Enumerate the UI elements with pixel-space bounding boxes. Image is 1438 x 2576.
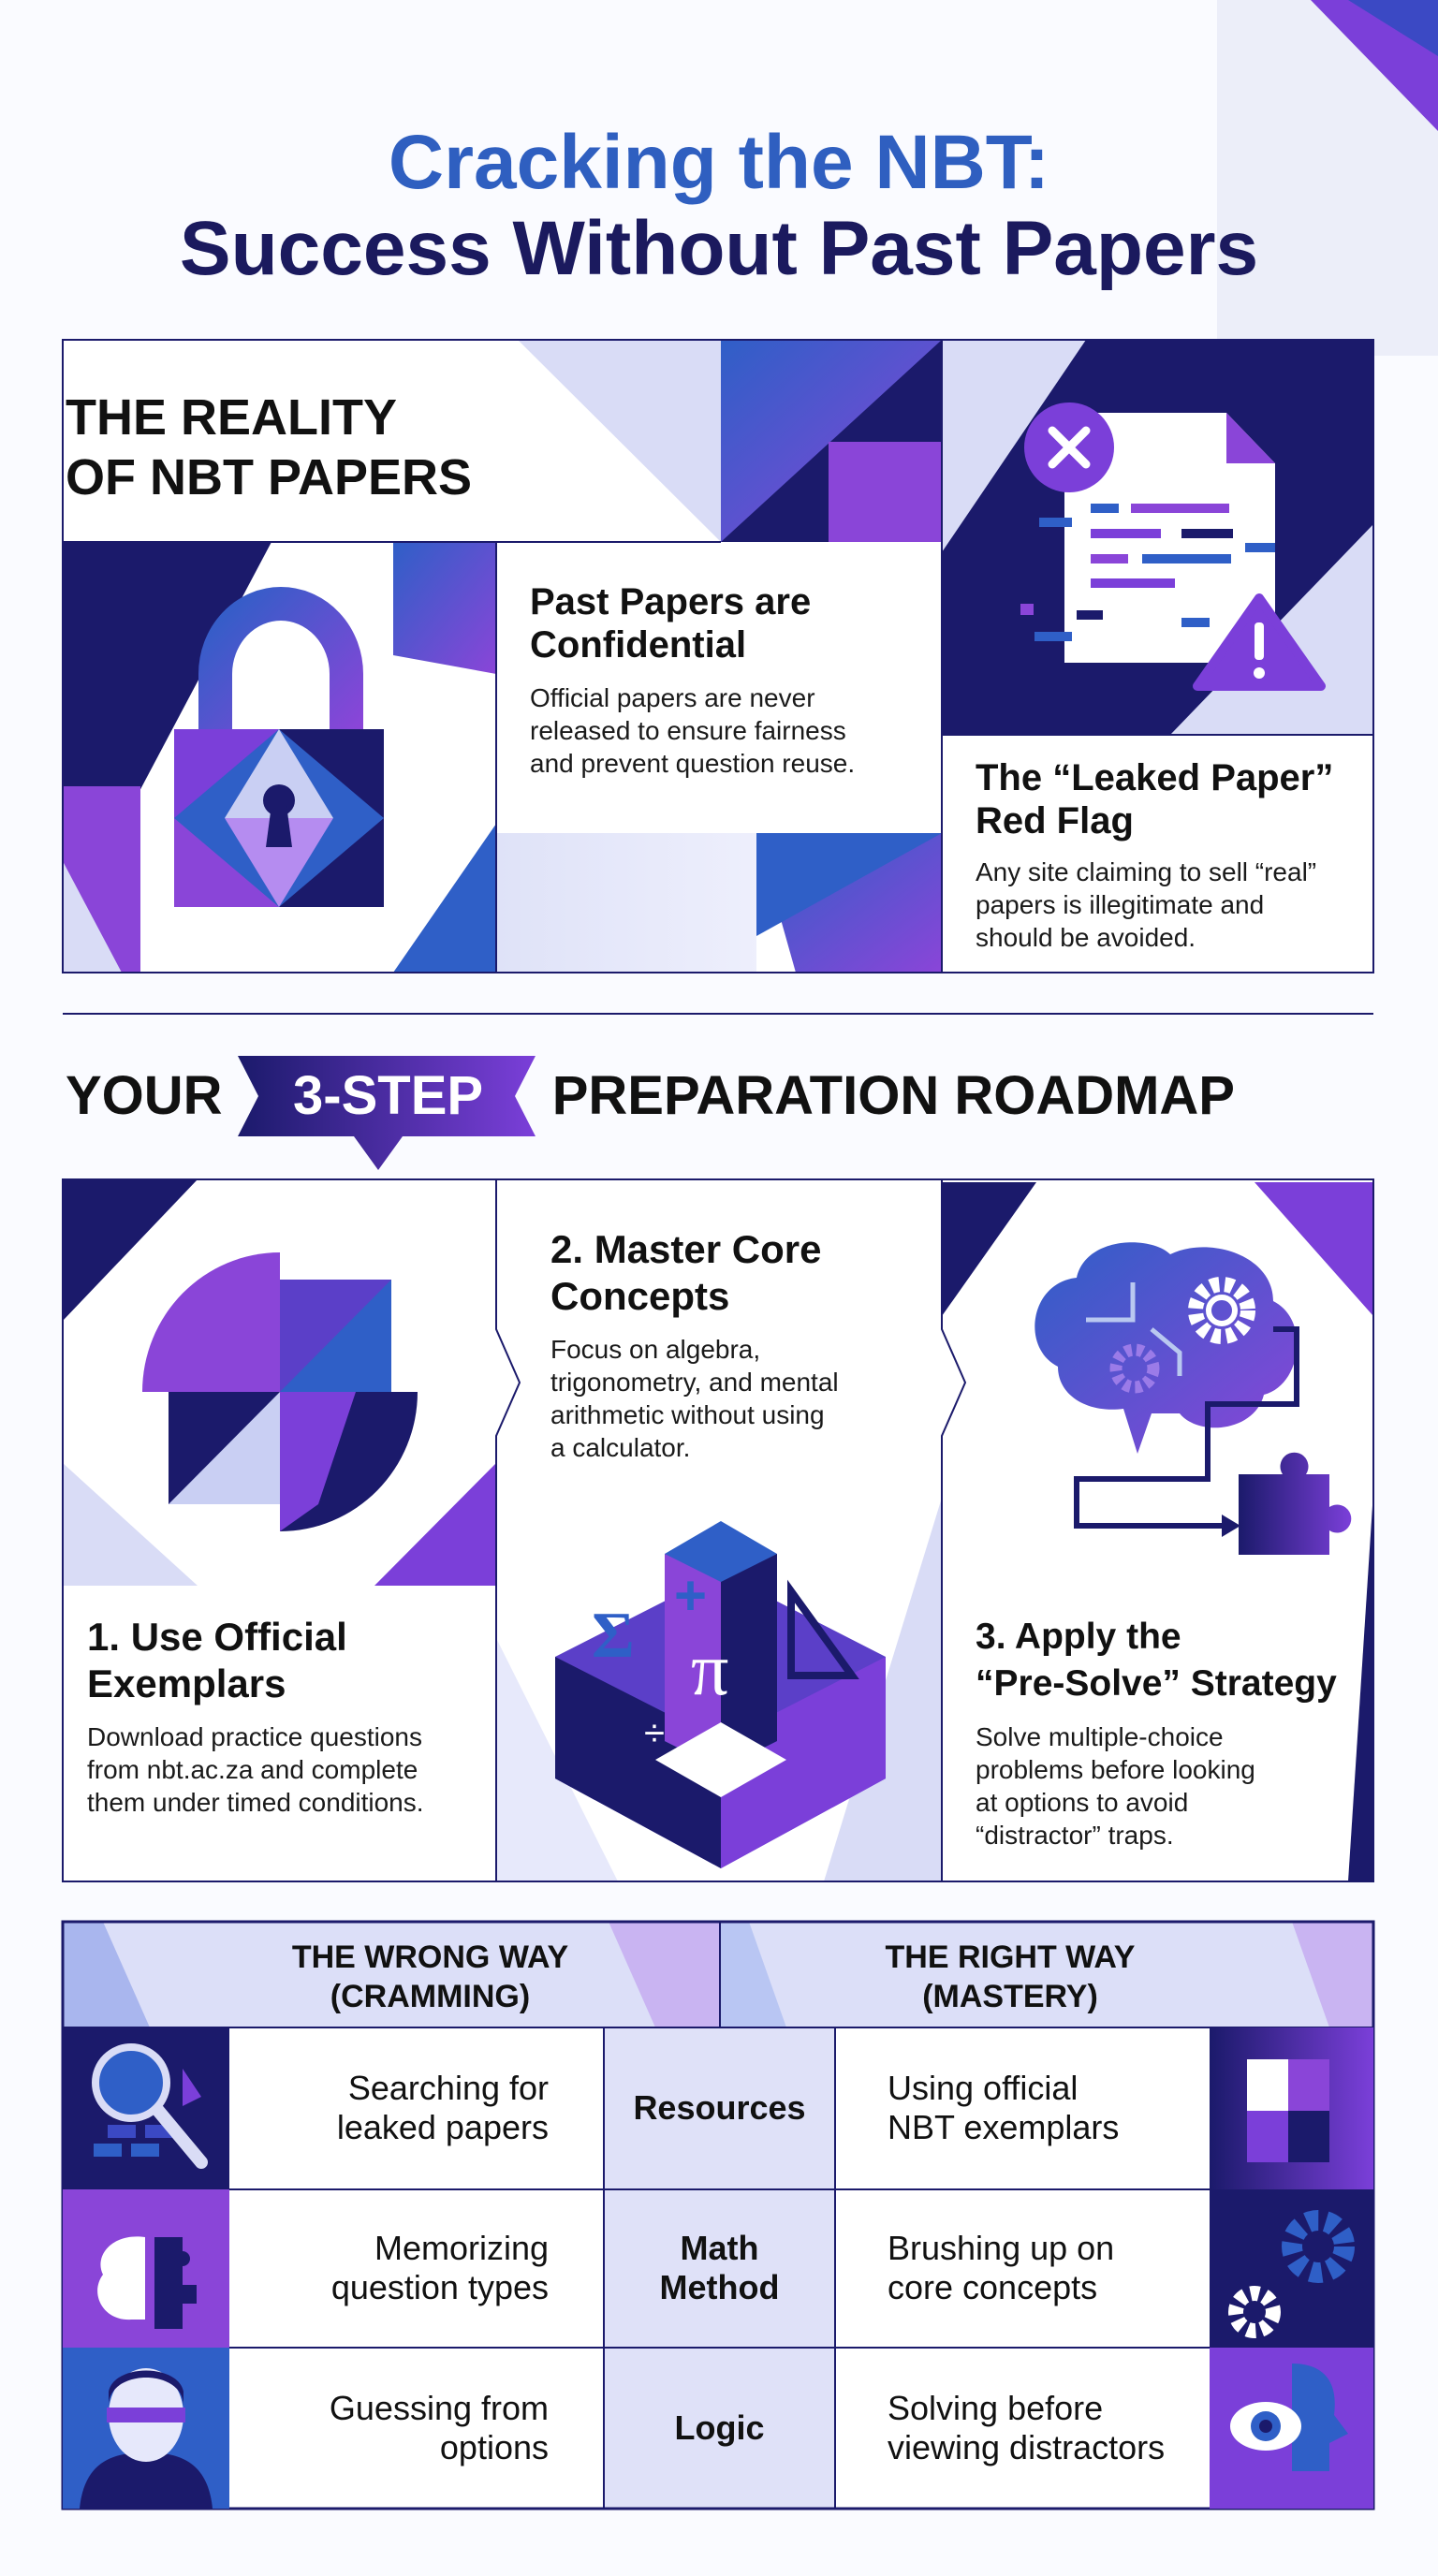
text block: step 1: Exemplars: [87, 1661, 286, 1705]
text block: step 2: a calculator.: [550, 1433, 690, 1462]
corner decoration: [1217, 0, 1438, 356]
icon: padlock: [174, 604, 384, 907]
row: math method: Memorizing: [374, 2229, 549, 2267]
text block: past papers are confidential: and prevent question reuse.: [530, 749, 855, 778]
icon: brain to puzzle: [1034, 1242, 1351, 1555]
heading: the reality of nbt papers: [66, 389, 472, 505]
icon: puzzle pieces: [1210, 2027, 1373, 2189]
text block: step 3: at options to avoid: [976, 1788, 1188, 1817]
text block: past papers are confidential: [530, 581, 855, 778]
text block: step 2: 2. Master Core: [550, 1227, 821, 1271]
title: Cracking the NBT:: [389, 120, 1049, 205]
row: logic: viewing distractors: [888, 2428, 1165, 2466]
icon: magnifier: [63, 2027, 229, 2189]
table header: wrong way: (CRAMMING): [330, 1979, 530, 2014]
heading: the reality of nbt papers: OF NBT PAPERS: [66, 449, 472, 505]
row: math method: Method: [660, 2268, 779, 2306]
text block: past papers are confidential: Official papers are never: [530, 683, 815, 712]
heading: the reality of nbt papers: THE REALITY: [66, 389, 397, 446]
text block: past papers are confidential: Confidential: [530, 624, 746, 666]
title: [180, 120, 1258, 291]
row: math method: question types: [331, 2268, 549, 2306]
icon: blindfolded person: [63, 2348, 229, 2509]
text block: step 3: Solve multiple-choice: [976, 1722, 1224, 1751]
row: logic: Guessing from: [330, 2389, 549, 2427]
text block: leaked paper red flag: The “Leaked Paper”: [976, 757, 1333, 798]
divider: [63, 1013, 1373, 1015]
row: logic: Logic: [674, 2408, 764, 2447]
panel: roadmap decorations: [63, 1179, 1373, 1881]
text block: step 1: Download practice questions: [87, 1722, 422, 1751]
text block: leaked paper red flag: Red Flag: [976, 800, 1134, 842]
row: logic: [330, 2389, 1165, 2466]
row: resources: leaked papers: [337, 2108, 549, 2146]
row: math method: Brushing up on: [888, 2229, 1114, 2267]
icon: math cubes: +: [674, 1564, 707, 1627]
row: logic: options: [440, 2428, 549, 2466]
table header: wrong way: [292, 1939, 568, 2014]
table header: right way: (MASTERY): [922, 1979, 1098, 2014]
icon: exemplar shapes: [142, 1252, 418, 1531]
text block: step 2: trigonometry, and mental: [550, 1368, 839, 1397]
text block: step 3: problems before looking: [976, 1755, 1255, 1784]
text block: step 1: from nbt.ac.za and complete: [87, 1755, 418, 1784]
icon: brain puzzle: [63, 2189, 229, 2348]
icon: math cubes: Σ: [592, 1600, 635, 1672]
text block: leaked paper red flag: [976, 757, 1333, 952]
text block: step 2: Concepts: [550, 1274, 729, 1318]
text block: step 3: “distractor” traps.: [976, 1821, 1174, 1850]
text block: step 3: [976, 1617, 1337, 1850]
text block: step 2: Focus on algebra,: [550, 1335, 760, 1364]
row: resources: Searching for: [348, 2069, 549, 2107]
text block: leaked paper red flag: should be avoided.: [976, 923, 1196, 952]
row: resources: [337, 2069, 1119, 2146]
row: resources: NBT exemplars: [888, 2108, 1119, 2146]
icon: math cubes: ÷: [644, 1713, 665, 1754]
title: Success Without Past Papers: [180, 206, 1258, 291]
icon: leaked document: [1020, 402, 1321, 686]
row: math method: [331, 2229, 1114, 2306]
badge: 3-step ribbon: [238, 1056, 536, 1170]
text block: step 1: 1. Use Official: [87, 1615, 347, 1659]
table header: right way: THE RIGHT WAY: [886, 1939, 1135, 1975]
row: math method: core concepts: [888, 2268, 1097, 2306]
text block: step 1: [87, 1615, 424, 1817]
icon: gears: [1210, 2189, 1373, 2348]
text block: leaked paper red flag: papers is illegitimate and: [976, 890, 1264, 919]
row: resources: Resources: [633, 2088, 806, 2127]
panel: comparison table background: [63, 1922, 1373, 2509]
text block: step 3: 3. Apply the: [976, 1617, 1181, 1657]
icon: math cubes: [555, 1521, 886, 1868]
heading: roadmap: YOUR PREPARATION ROADMAP: [66, 1065, 1235, 1126]
table header: right way: [886, 1939, 1135, 2014]
row: math method: Math: [680, 2229, 758, 2267]
text block: step 2: [550, 1227, 839, 1462]
row: resources: Using official: [888, 2069, 1078, 2107]
table header: wrong way: THE WRONG WAY: [292, 1939, 568, 1975]
icon: eye head: [1210, 2348, 1373, 2509]
text block: step 2: arithmetic without using: [550, 1400, 825, 1429]
text block: past papers are confidential: released to ensure fairness: [530, 716, 846, 745]
text block: past papers are confidential: Past Papers are: [530, 581, 811, 622]
row: logic: Solving before: [888, 2389, 1103, 2427]
text block: step 1: them under timed conditions.: [87, 1788, 424, 1817]
heading: roadmap: 3-STEP: [293, 1065, 483, 1126]
panel: reality decorations: [63, 340, 1373, 973]
text block: step 3: “Pre-Solve” Strategy: [976, 1663, 1337, 1704]
text block: leaked paper red flag: Any site claiming to sell “real”: [976, 857, 1316, 886]
icon: math cubes: π: [691, 1629, 728, 1711]
